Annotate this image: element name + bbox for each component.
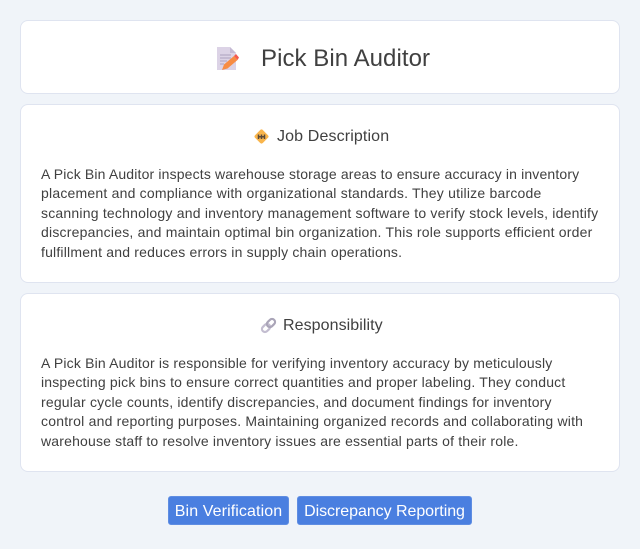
- tag: bin verification: Bin Verification: [175, 503, 282, 520]
- icon: road sign diamond: [254, 129, 268, 144]
- icon: document with pencil: [217, 47, 239, 70]
- responsibility text: inspecting pick bins to ensure correct quantities and proper labeling. They conduct: [41, 374, 565, 390]
- responsibility text: [41, 355, 583, 449]
- title text: Pick Bin Auditor: [261, 45, 430, 72]
- panel: title: [20, 20, 620, 94]
- description text: discrepancies, and maintain optimal bin organization. This role supports efficient order: [41, 224, 593, 240]
- description text: [41, 166, 598, 260]
- icon: chain link: [260, 318, 276, 334]
- panel: responsibility: [20, 293, 620, 472]
- description text: fulfillment and reduces errors in supply chain operations.: [41, 244, 402, 260]
- responsibility text: warehouse staff to resolve inventory issues are essential parts of their role.: [41, 433, 519, 449]
- tag: discrepancy reporting: [297, 496, 472, 525]
- tag: bin verification: [168, 496, 289, 525]
- panel: job description: [20, 104, 620, 283]
- description text: placement and compliance with organizational standards. They utilize barcode: [41, 185, 542, 201]
- responsibility text: A Pick Bin Auditor is responsible for verifying inventory accuracy by meticulously: [41, 355, 552, 371]
- description text: scanning technology and inventory management software to verify stock levels, identify: [41, 205, 598, 221]
- description text: A Pick Bin Auditor inspects warehouse storage areas to ensure accuracy in inventory: [41, 166, 579, 182]
- heading: responsibility: Responsibility: [283, 317, 383, 334]
- tag: discrepancy reporting: Discrepancy Reporting: [304, 503, 465, 520]
- responsibility text: control and reporting purposes. Maintaining organized records and collaborating with: [41, 413, 583, 429]
- responsibility text: regular cycle counts, identify discrepancies, and document findings for inventory: [41, 394, 552, 410]
- heading: job description: Job Description: [277, 128, 389, 145]
